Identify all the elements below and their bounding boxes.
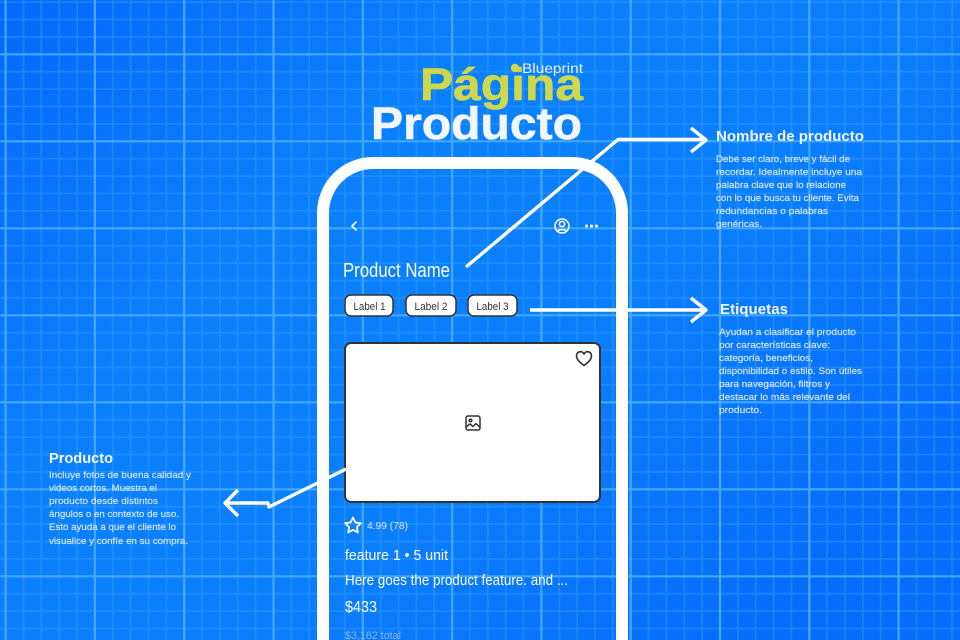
icon: user profile — [555, 219, 569, 233]
callout body: Debe ser claro, breve y fácil de — [716, 154, 850, 165]
callout body: por características clave: — [719, 340, 830, 351]
callout: Producto — [49, 450, 191, 547]
callout: Nombre de producto — [716, 128, 864, 230]
callout heading: Producto — [49, 450, 113, 467]
chip: label 1: Label 1 — [354, 301, 386, 313]
callout body: categoría, beneficios, — [719, 353, 813, 364]
icon: star — [345, 518, 361, 532]
chip: label 2 — [406, 295, 456, 316]
title — [371, 59, 584, 149]
title: Blueprint tag: Blueprint — [522, 60, 583, 76]
icon: more dots — [585, 224, 598, 228]
callout body — [719, 327, 862, 416]
callout heading: Nombre de producto — [716, 128, 864, 145]
phone frame — [323, 163, 622, 640]
callout body: disponibilidad o estilo. Son útiles — [719, 366, 862, 377]
label chips — [345, 295, 517, 316]
callout body: ángulos o en contexto de uso. — [49, 509, 179, 520]
product name: Product Name — [343, 260, 450, 282]
callout body: destacar lo más relevante del — [719, 392, 850, 403]
callout body: palabra clave que lo relacione — [716, 180, 846, 191]
icon: back chevron — [352, 222, 356, 230]
title: Página: Página — [420, 59, 584, 110]
chip: label 2: Label 2 — [414, 301, 448, 313]
callout body: genéricas. — [716, 219, 762, 230]
callout body: con lo que busca tu cliente. Evita — [716, 193, 860, 204]
rating: 4.99 (78) — [367, 521, 408, 532]
chip: label 1 — [345, 295, 393, 316]
callout: Etiquetas — [719, 301, 862, 416]
callout body: para navegación, filtros y — [719, 379, 830, 390]
icon: image — [466, 416, 480, 430]
callout body: recordar. Idealmente incluye una — [716, 167, 863, 178]
arrow: product name — [466, 128, 706, 267]
arrow: product image — [225, 469, 346, 516]
icon: heart — [576, 352, 592, 366]
phone mockup — [323, 163, 622, 640]
callout body: redundancias o palabras — [716, 206, 828, 217]
callout body: videos cortos. Muestra el — [49, 483, 157, 494]
chip: label 3 — [468, 295, 517, 316]
feature description: Here goes the product feature. and ... — [345, 572, 568, 589]
product image placeholder — [345, 343, 600, 502]
arrow: labels — [530, 298, 706, 322]
title: Producto: Producto — [371, 98, 582, 149]
price: $433 — [345, 599, 377, 616]
callout body: Esto ayuda a que el cliente lo — [49, 522, 176, 533]
callout body: Incluye fotos de buena calidad y — [49, 470, 191, 481]
callout body: Ayudan a clasificar el producto — [719, 327, 856, 338]
feature heading: feature 1 • 5 unit — [345, 547, 449, 564]
callout body: producto desde distintos — [49, 496, 158, 507]
callout body: visualice y confíe en su compra. — [49, 536, 188, 547]
callout body: producto. — [719, 405, 762, 416]
callout body — [49, 470, 191, 547]
callout heading: Etiquetas — [720, 301, 788, 318]
callout body — [716, 154, 863, 230]
chip: label 3: Label 3 — [476, 301, 508, 313]
